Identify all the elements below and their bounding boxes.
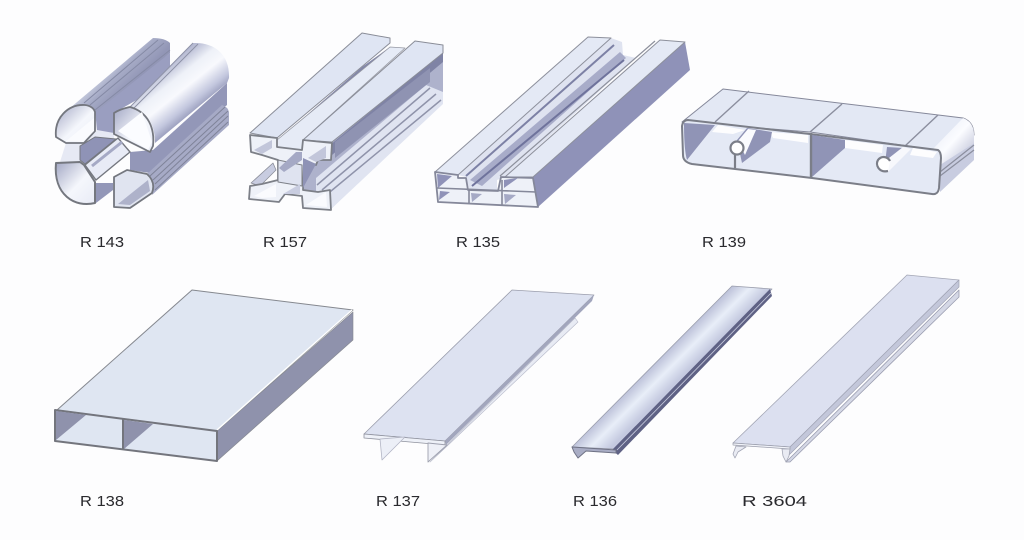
right tube [885,147,903,163]
left tube [737,128,772,163]
front opening [682,120,941,194]
top faces [435,37,611,175]
top-left lobe outside [70,38,170,112]
profile R 157 [249,33,443,210]
left clip [733,446,746,458]
centre web [810,133,812,178]
double rail [788,280,959,456]
profile R 138 [55,290,353,461]
left lower rail [251,163,276,186]
label R 157: R 157 [263,235,307,251]
top face [682,89,974,150]
left hook [730,142,744,154]
label R 138: R 138 [80,494,124,510]
front lip [733,443,790,449]
top face [733,275,959,447]
legs [380,437,405,460]
top-left lobe front [56,105,95,143]
front lip [572,447,616,458]
top faces [250,33,390,138]
top face [572,286,772,449]
profile R 136 [572,286,772,458]
profile R 137 [364,290,594,462]
front section [435,172,538,207]
groove [458,38,636,192]
top face [364,290,594,441]
label R 137: R 137 [376,494,420,510]
profile R 143 [56,38,229,208]
centre web walls [80,137,116,164]
label R 3604: R 3604 [742,494,807,510]
right dark side [533,42,690,207]
bottom-right lobe [147,105,229,195]
front lip [364,434,445,445]
centre floor strips [60,130,114,162]
edge rail [445,295,594,445]
bottom-left lobe [56,162,95,204]
dark channels between lobes [95,53,170,135]
front section [55,410,217,461]
dark rail [612,289,772,455]
right clip [782,449,790,462]
profile R 139 [682,89,974,194]
label R 143: R 143 [80,235,124,251]
top-right lobe [130,43,229,143]
right long side [302,53,443,210]
label R 139: R 139 [702,235,746,251]
profile R 135 [435,37,690,207]
label R 135: R 135 [456,235,500,251]
right end side [940,143,974,192]
top face [57,290,353,431]
side face [217,312,353,461]
label R 136: R 136 [573,494,617,510]
right hook [877,157,890,171]
front section [249,135,332,210]
profile R 3604 [733,275,959,462]
